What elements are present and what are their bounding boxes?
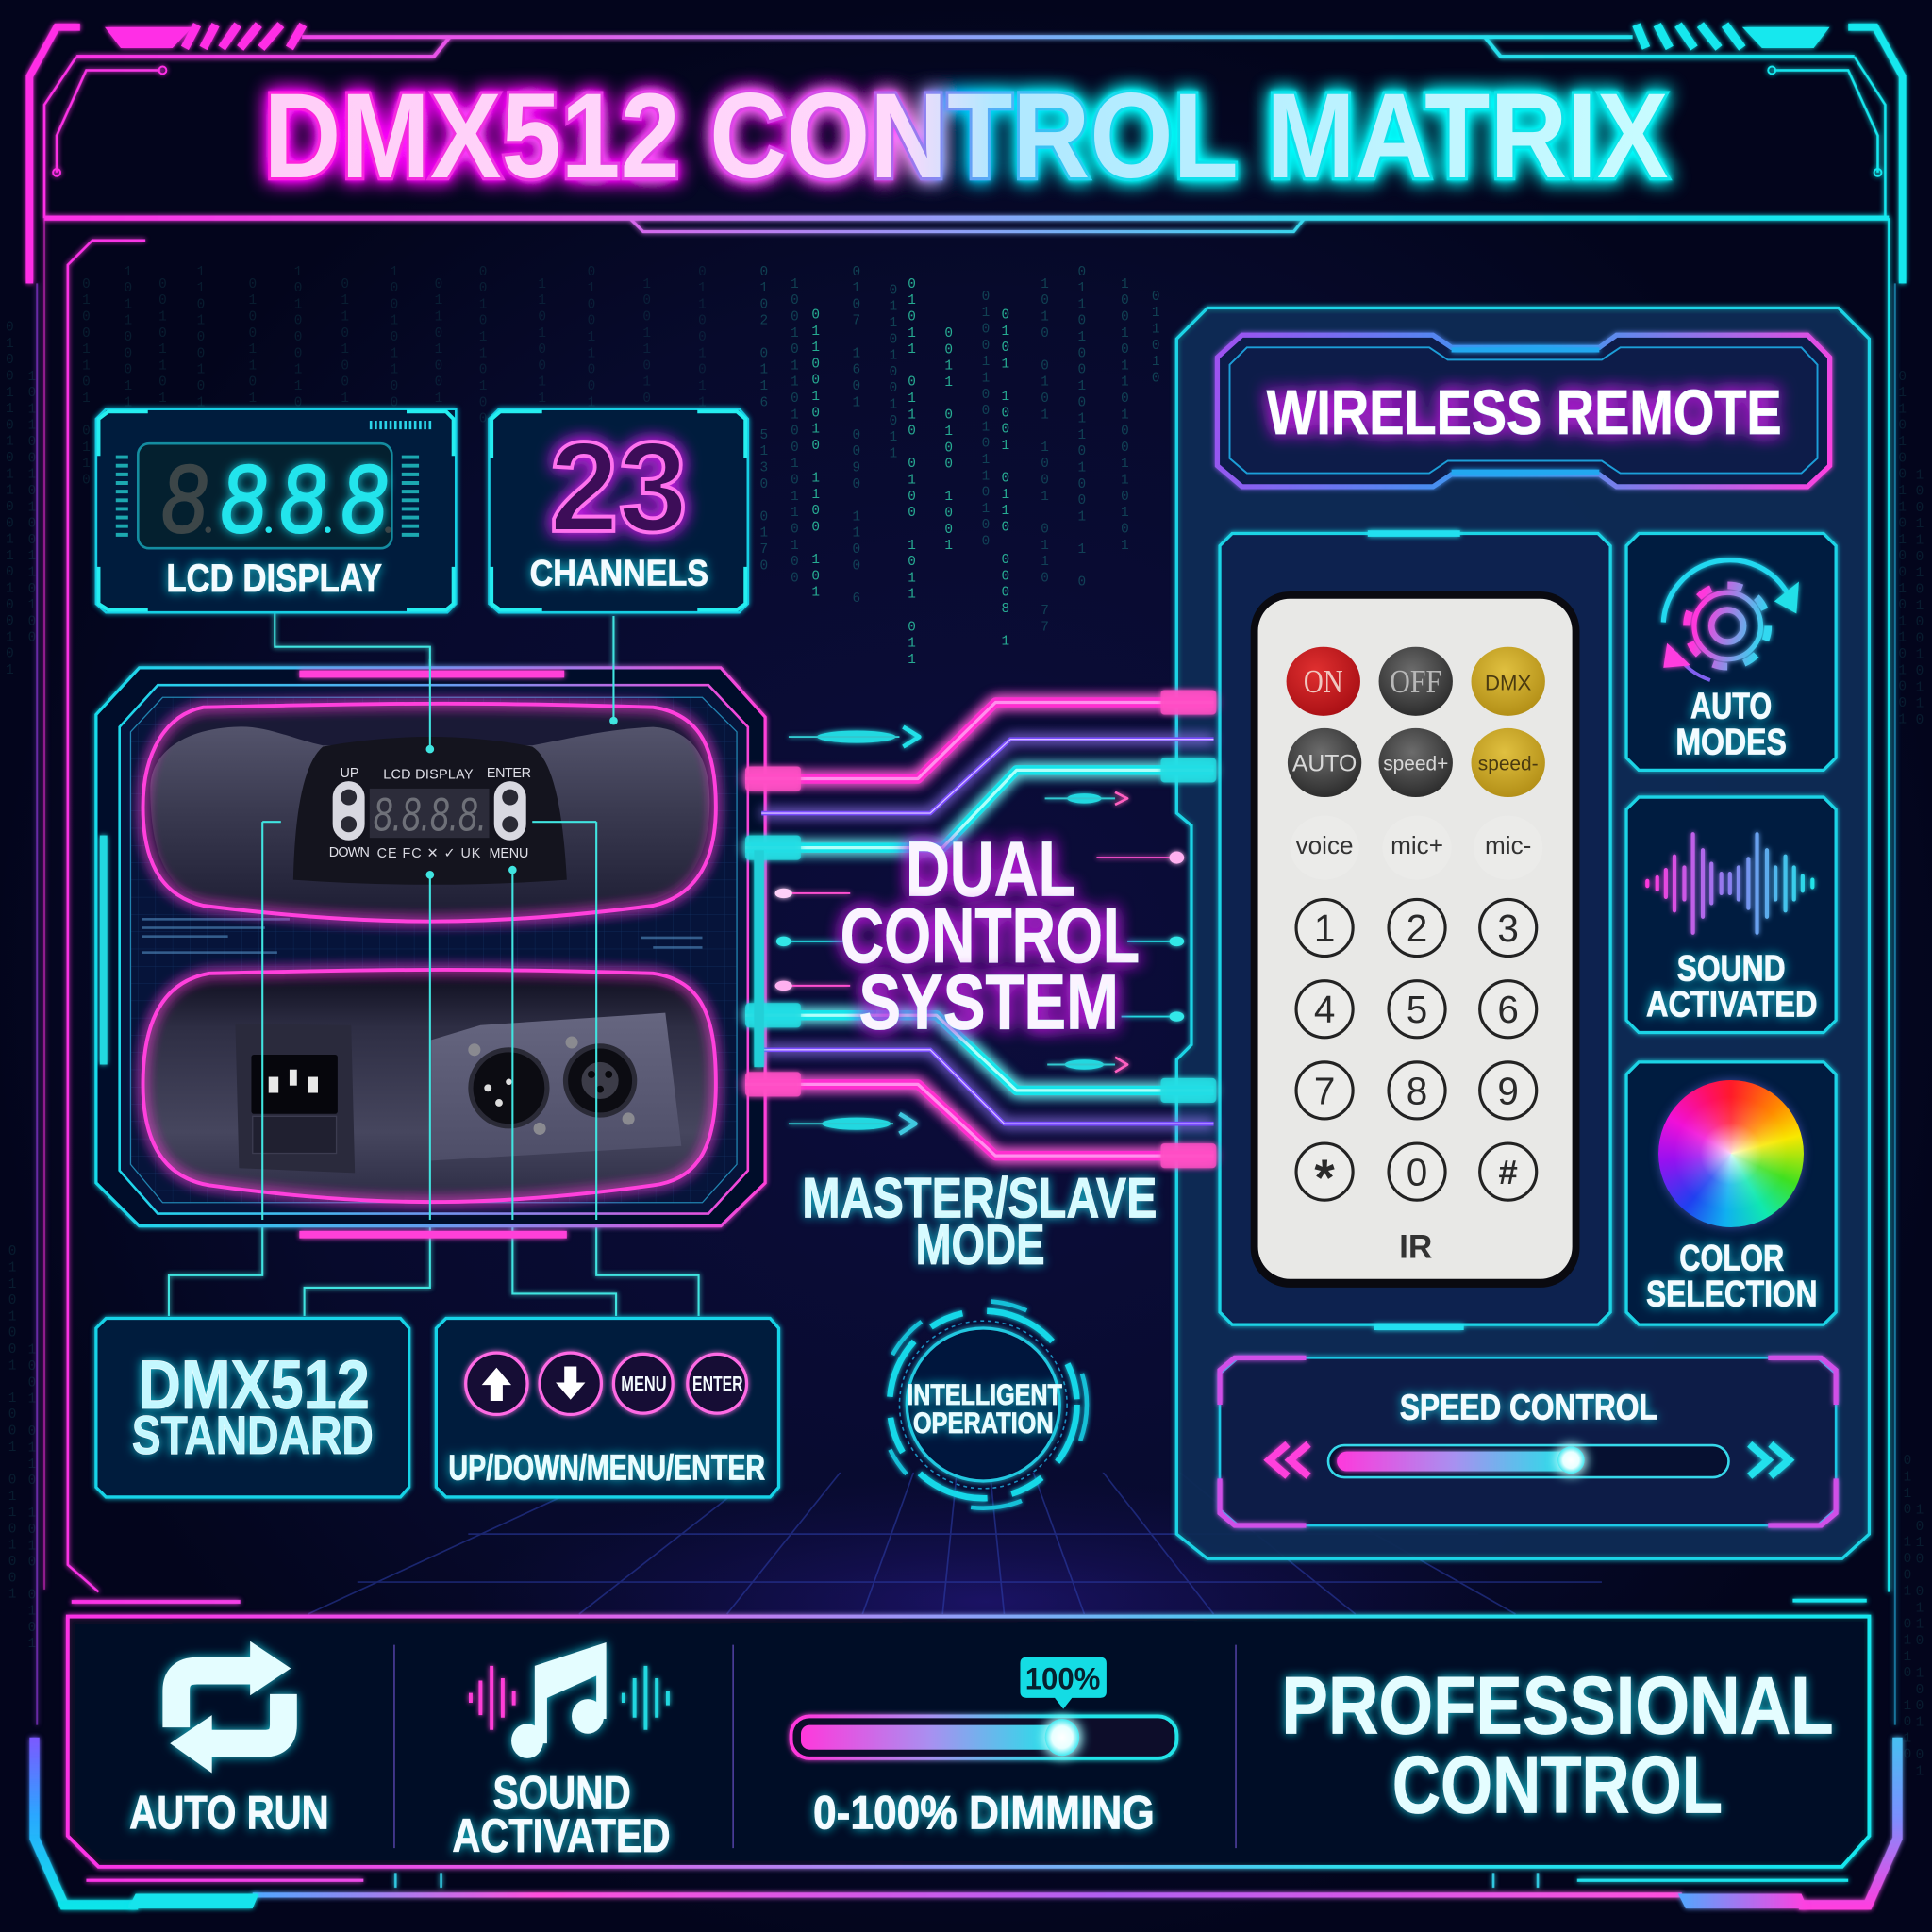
panel: LCD display callout xyxy=(96,409,456,612)
number keys: * xyxy=(1314,1148,1335,1207)
text: 0110100101101001 1 0 xyxy=(1074,265,1090,591)
text: 011001010 1100 101 xyxy=(808,308,824,602)
number keys: # xyxy=(1499,1153,1518,1191)
coloured keys: OFF xyxy=(1390,663,1441,700)
heading: dual control system: SYSTEM xyxy=(858,960,1119,1046)
text: 1001101010010110 xyxy=(1912,468,1927,729)
text: 1001011001 xyxy=(387,265,402,428)
coloured keys: ON xyxy=(1304,663,1343,700)
coloured keys xyxy=(1287,647,1545,797)
text: 1001 0110 1010 0101 xyxy=(25,1343,40,1654)
text: 0100110010110100 xyxy=(978,290,993,551)
coloured keys: AUTO xyxy=(1292,752,1357,777)
panel: sound activated: ACTIVATED xyxy=(1646,985,1818,1025)
header corner brackets xyxy=(44,37,1889,1592)
text: 110100101101 xyxy=(193,265,208,461)
number keys: 3 xyxy=(1497,907,1519,950)
panel: up/down/menu/enter buttons: UP/DOWN/MENU/ENTER xyxy=(448,1449,765,1489)
number keys: 0 xyxy=(1407,1150,1427,1193)
feature: dimming slider: 0-100% DIMMING xyxy=(813,1786,1155,1839)
number keys xyxy=(1296,899,1537,1207)
coloured keys: speed+ xyxy=(1383,753,1448,774)
power inlet xyxy=(235,1024,355,1173)
text: 1001011010010110100 xyxy=(787,277,802,588)
button icons xyxy=(466,1353,747,1414)
panel: DMX512 standard xyxy=(96,1319,409,1497)
text: 0110100110010110 xyxy=(338,277,353,539)
text: 1010 0101 1001 0110 77 xyxy=(1038,277,1053,637)
text: professional control: CONTROL xyxy=(1392,1740,1723,1830)
number keys: 8 xyxy=(1407,1069,1427,1112)
text: 01101001011 xyxy=(886,283,901,463)
connector plugs xyxy=(745,690,1216,1168)
bottom device: connectors side xyxy=(143,970,716,1202)
text: 10110010100110100 xyxy=(25,370,40,647)
panel: color selection: SELECTION xyxy=(1646,1274,1818,1314)
icon: gear with cycle arrows xyxy=(1663,560,1799,680)
LCD readout xyxy=(116,443,419,553)
feature: sound activated: ACTIVATED xyxy=(452,1809,671,1862)
feature: auto run xyxy=(129,1641,329,1839)
text: 0010110100110 xyxy=(155,277,170,490)
number keys: 7 xyxy=(1314,1069,1335,1112)
button icons: ENTER xyxy=(692,1373,743,1396)
control plate xyxy=(293,737,567,885)
heading: dual control system: CONTROL xyxy=(841,893,1140,979)
text: 10100011010 xyxy=(291,265,306,444)
voice and mic keys: voice xyxy=(1296,831,1354,859)
LCD readout: 8 xyxy=(161,445,208,553)
LCD readout: 8 xyxy=(221,445,266,553)
text: master/slave mode xyxy=(802,1166,1157,1276)
number keys: 1 xyxy=(1314,907,1335,950)
text: 0110 1001 0110 1010 xyxy=(1900,1454,1915,1764)
connector lines between callouts and device xyxy=(169,612,699,1316)
LCD readout: 8 xyxy=(279,445,325,553)
panel: auto modes xyxy=(1626,534,1836,770)
control plate: UP xyxy=(340,766,358,781)
control plate: MENU xyxy=(490,846,528,861)
button icons: MENU xyxy=(621,1373,667,1396)
callout lines over device xyxy=(262,659,617,1220)
panel: color selection: COLOR xyxy=(1679,1239,1784,1279)
icon: music note with waves xyxy=(471,1642,668,1758)
heading: wireless remote xyxy=(1217,335,1830,487)
feature: sound activated: SOUND xyxy=(492,1766,631,1819)
panel: auto modes: AUTO xyxy=(1690,686,1772,726)
label: CHANNELS xyxy=(530,553,708,593)
top device: display side xyxy=(143,704,716,922)
text: master/slave mode: MODE xyxy=(915,1213,1045,1276)
badge: intelligent operation: INTELLIGENT xyxy=(907,1378,1062,1411)
tooltip: 100%: 100% xyxy=(1025,1661,1100,1696)
control plate: ENTER xyxy=(487,766,531,781)
top pipe group xyxy=(745,702,1214,848)
panel: up/down/menu/enter buttons xyxy=(436,1319,778,1497)
signal pipes: device to remote xyxy=(745,690,1216,1168)
tooltip: 100% xyxy=(1020,1657,1107,1709)
panel: speed control xyxy=(1220,1357,1836,1525)
panel: sound activated xyxy=(1626,797,1836,1033)
panel: bottom feature bar xyxy=(68,1617,1869,1867)
badge: intelligent operation: OPERATION xyxy=(913,1407,1054,1440)
voice and mic keys xyxy=(1291,816,1542,880)
text: 01101001101 xyxy=(431,277,446,457)
coloured keys: speed- xyxy=(1478,753,1539,774)
panel: 23 channels callout xyxy=(490,409,748,612)
text: 10010110100110101 xyxy=(1117,277,1132,555)
number keys: 9 xyxy=(1497,1069,1519,1112)
heading: dual control system xyxy=(841,827,1140,1046)
voice and mic keys: mic- xyxy=(1485,831,1531,859)
feature: sound activated xyxy=(452,1642,671,1862)
text: 110100110010 xyxy=(535,277,550,474)
text: 0101 1001 0110 0008 1 xyxy=(998,308,1013,651)
control plate: CE FC ✕ ✓ UK xyxy=(377,846,481,861)
text: 0010110100 xyxy=(475,265,491,428)
number keys: 2 xyxy=(1407,907,1427,950)
text: 0110010110 xyxy=(694,265,709,428)
voice and mic keys: mic+ xyxy=(1391,831,1443,859)
text: master/slave mode: MASTER/SLAVE xyxy=(802,1166,1157,1229)
coloured keys: DMX xyxy=(1485,671,1532,694)
number keys: 5 xyxy=(1407,988,1427,1031)
control plate: 8.8.8.8. xyxy=(374,788,487,841)
number keys: 6 xyxy=(1497,988,1519,1031)
panel: auto modes: MODES xyxy=(1675,722,1787,762)
icon: sound wave xyxy=(1647,834,1812,933)
XLR female xyxy=(566,1036,635,1124)
text: 0100110101100110100101 xyxy=(2,321,17,679)
speed slider xyxy=(1269,1444,1789,1477)
icon: repeat arrows xyxy=(170,1641,291,1774)
bottom pipe group xyxy=(745,1015,1214,1156)
text: 01011 0110 0100 1011 011 xyxy=(905,277,920,669)
text: 0110100110100101101001 xyxy=(1895,370,1910,729)
text: professional control xyxy=(1281,1661,1834,1830)
text: 1010 0110 1001 01 xyxy=(1912,1503,1927,1781)
panel: speed control: SPEED CONTROL xyxy=(1400,1389,1657,1428)
heading: dual control system: DUAL xyxy=(906,827,1075,913)
panel: color selection xyxy=(1626,1062,1836,1324)
badge: intelligent operation xyxy=(880,1301,1087,1508)
panel: sound activated: SOUND xyxy=(1677,949,1786,990)
LCD readout: 8 xyxy=(341,445,387,553)
icon: colour wheel xyxy=(1658,1080,1804,1227)
data pulses xyxy=(775,727,1184,1134)
IR label: IR xyxy=(1399,1229,1432,1266)
text: 0107 1601 0090 1100 6 xyxy=(849,265,864,608)
panel: remote frame xyxy=(1220,534,1610,1327)
text: 0102 0116 5130 0170 xyxy=(757,265,772,575)
text: 0100110101100110 xyxy=(245,277,260,539)
XLR male xyxy=(468,1043,547,1135)
text: 0100110010 xyxy=(584,265,599,428)
remote control xyxy=(1251,591,1579,1288)
feature: dimming slider xyxy=(791,1657,1176,1839)
number keys: 4 xyxy=(1314,988,1335,1031)
panel: DMX512 standard: STANDARD xyxy=(132,1406,374,1466)
control plate: LCD DISPLAY xyxy=(383,767,474,782)
title: DMX512 CONTROL MATRIX xyxy=(264,69,1668,204)
text: 1011000110100110 xyxy=(121,265,136,526)
panel: DMX512 standard: DMX512 xyxy=(138,1347,370,1424)
control plate: DOWN xyxy=(329,845,370,860)
text: 01101001 1001 01101001 xyxy=(5,1244,20,1604)
text: 011010 xyxy=(1148,290,1163,388)
panel: device rear views xyxy=(96,668,765,1239)
heading: wireless remote: WIRELESS REMOTE xyxy=(1267,378,1782,448)
text: 01001101 0110 xyxy=(78,277,93,490)
text: professional control: PROFESSIONAL xyxy=(1281,1661,1834,1752)
feature: auto run: AUTO RUN xyxy=(129,1786,329,1839)
number 23: 23 xyxy=(550,415,688,558)
panel: wireless remote column xyxy=(1176,308,1869,1558)
label: LCD DISPLAY xyxy=(166,556,382,600)
text: 10011010011 xyxy=(640,277,655,457)
text: 0011 0100 1001 xyxy=(941,326,957,555)
